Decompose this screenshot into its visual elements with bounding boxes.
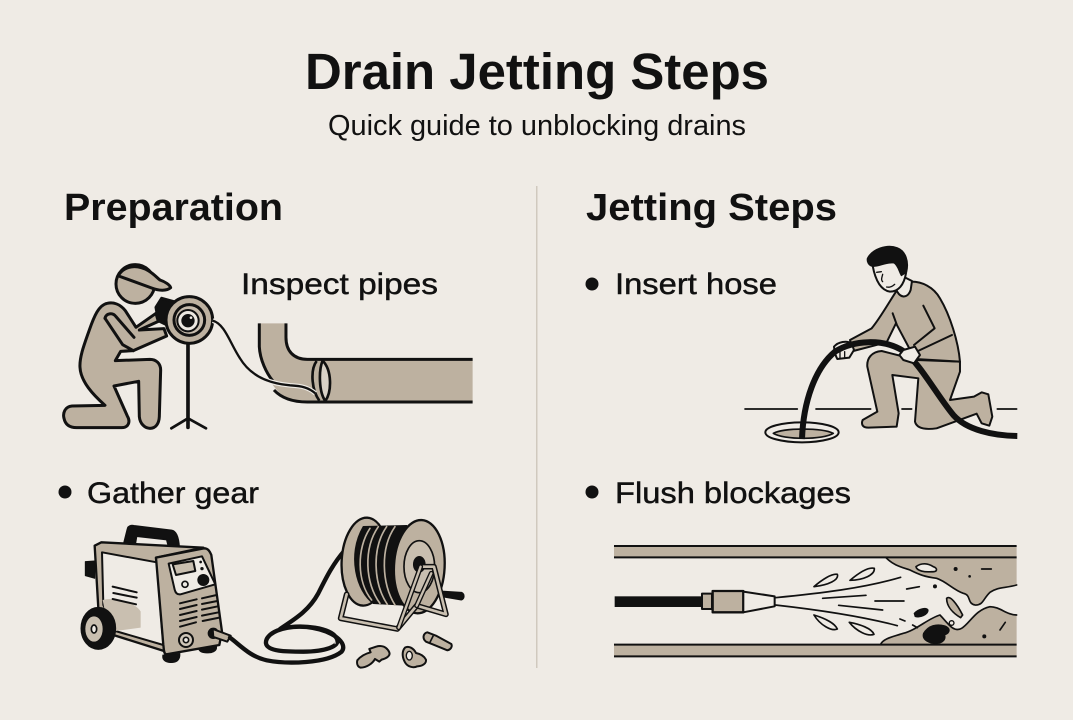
head and cap (116, 265, 155, 303)
bullet: flush blockages (586, 486, 598, 498)
blockage upper (886, 558, 1017, 605)
tripod (171, 343, 206, 428)
icon: pipe elbow with cable (213, 321, 473, 402)
label: gather gear: Gather gear (87, 477, 259, 510)
icon: pressure jetter machine (81, 525, 231, 663)
icon: jet nozzles (357, 632, 452, 668)
debris (916, 564, 937, 572)
icon: hose reel (339, 517, 464, 629)
subtitle: Quick guide to unblocking drains (328, 110, 746, 142)
machine wheel (81, 607, 116, 649)
ground line (745, 406, 1017, 411)
drain hole (765, 422, 839, 442)
icon: worker with inspection camera (64, 265, 213, 428)
label: inspect pipes: Inspect pipes (241, 268, 438, 301)
bullet: insert hose (586, 278, 598, 290)
label: flush blockages: Flush blockages (615, 477, 851, 510)
camera lens (166, 297, 213, 343)
lower pipe wall (614, 645, 1017, 656)
inspection cable (213, 321, 315, 393)
icon: pipe section with jet nozzle flushing a blockage (614, 546, 1017, 656)
man right hand (899, 347, 920, 363)
icon: hose (230, 550, 345, 663)
reel back flange (339, 517, 391, 607)
man legs (862, 351, 992, 429)
nozzle (702, 594, 712, 609)
heading: jetting steps: Jetting Steps (586, 187, 837, 229)
reel coil (355, 526, 407, 605)
title: Drain Jetting Steps (305, 43, 769, 100)
hose (615, 596, 702, 607)
reel crank (440, 591, 464, 600)
man collar (896, 277, 912, 296)
worker body (64, 265, 213, 428)
upper pipe wall (614, 546, 1017, 557)
man hair (867, 246, 908, 276)
bullet: gather gear (58, 486, 72, 498)
man head (873, 258, 906, 292)
machine side (95, 542, 203, 652)
man left hand (834, 342, 854, 359)
machine handle (124, 525, 179, 548)
man torso (850, 282, 960, 362)
machine front (156, 548, 222, 654)
machine outlet (208, 628, 219, 639)
reel front flange (392, 519, 447, 615)
heading: preparation: Preparation (64, 187, 283, 229)
hose (802, 342, 1017, 439)
label: insert hose: Insert hose (615, 268, 777, 301)
camera back (156, 298, 174, 327)
blockage lower (881, 607, 1017, 645)
icon: man inserting hose into drain (745, 246, 1017, 442)
reel stand (341, 567, 446, 629)
water spray (775, 577, 919, 628)
